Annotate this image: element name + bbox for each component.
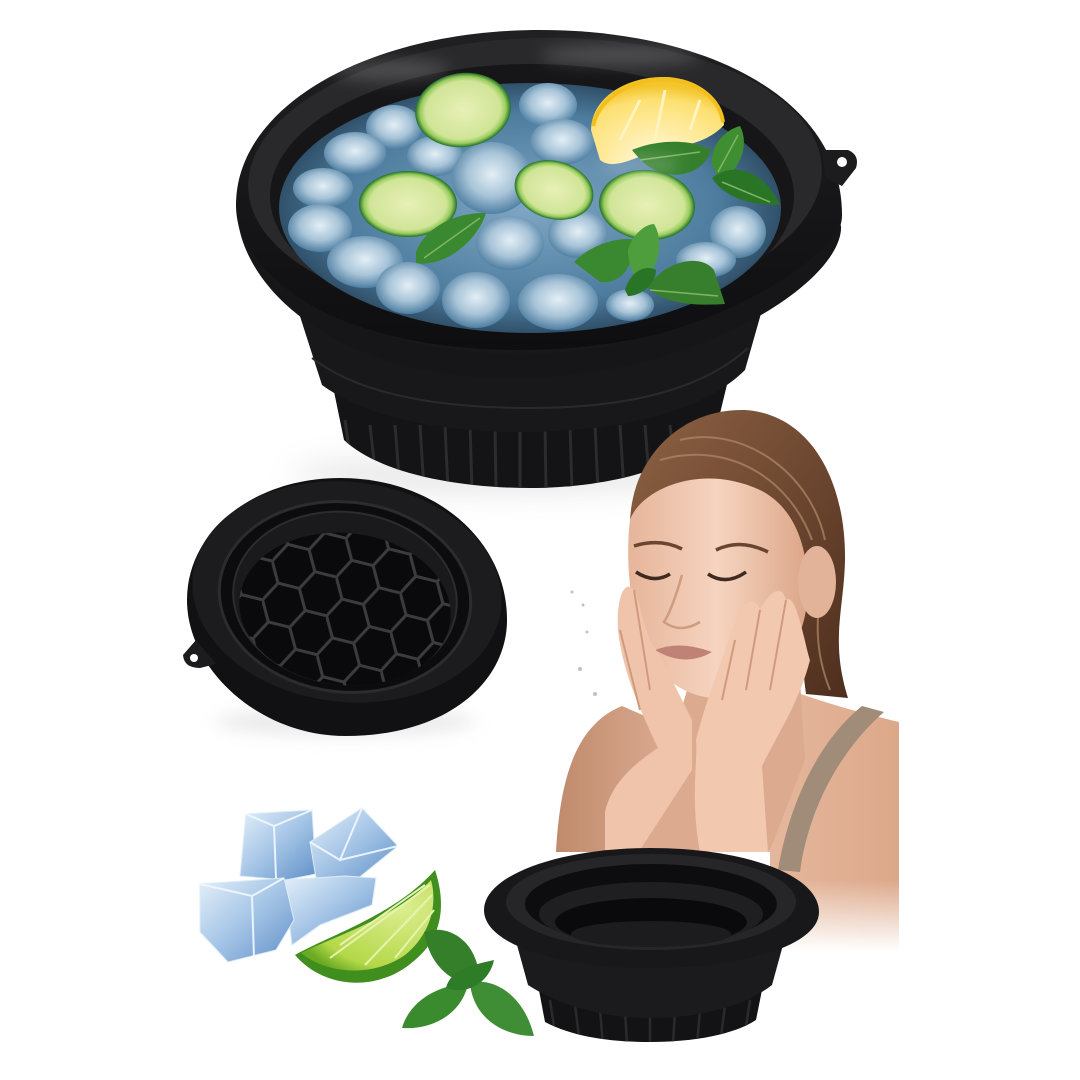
- mint sprig: [402, 984, 468, 1028]
- hair strands: [660, 437, 830, 690]
- middle wall: [298, 310, 762, 432]
- rim opening: [506, 854, 796, 950]
- mint sprigs: [416, 126, 780, 305]
- ice cubes and lime: [200, 808, 534, 1036]
- base ring: [538, 985, 763, 1042]
- outer shell: [187, 478, 507, 736]
- inner folds: [525, 864, 777, 944]
- lemon slice: [591, 77, 724, 164]
- woman washing face: [556, 410, 905, 951]
- neck: [640, 680, 805, 850]
- lips: [655, 645, 712, 660]
- face: [628, 478, 807, 698]
- product composition: [183, 30, 899, 1042]
- top strap: [778, 706, 884, 872]
- base ridges: [345, 420, 702, 490]
- nose: [664, 575, 700, 628]
- lime wedge: [295, 870, 441, 983]
- steam: [330, 45, 700, 177]
- ice cubes: [240, 810, 316, 880]
- water droplets: [570, 590, 597, 696]
- outer rim: [236, 30, 842, 350]
- ice cubes: [288, 83, 766, 330]
- eyebrows: [634, 543, 768, 552]
- rim ellipse: [181, 466, 513, 718]
- honeycomb base: [232, 522, 458, 696]
- large bowl with water, ice and garnish: [236, 28, 857, 490]
- inner rim: [243, 28, 827, 328]
- hair: [630, 410, 848, 698]
- outer rim: [484, 848, 819, 968]
- large bowl shadow: [290, 454, 710, 494]
- rim underside: [238, 222, 841, 378]
- water: [279, 83, 781, 333]
- folded bowl shadow: [215, 708, 475, 736]
- collapsed base ring: [330, 372, 730, 488]
- lower fade: [765, 880, 905, 951]
- ice highlights: [200, 808, 398, 958]
- cucumber slices: [359, 67, 698, 244]
- open bowl side view: [484, 848, 819, 1045]
- finger lines: [722, 600, 786, 700]
- folded bowl top view: [181, 466, 513, 736]
- body and shoulders: [556, 690, 899, 950]
- closed eyes: [636, 572, 746, 580]
- hanging loop: [183, 640, 216, 668]
- right hand: [695, 591, 810, 852]
- left hand: [605, 587, 692, 850]
- ear: [798, 546, 836, 618]
- wall: [517, 945, 783, 1018]
- hanging loop: [822, 150, 857, 186]
